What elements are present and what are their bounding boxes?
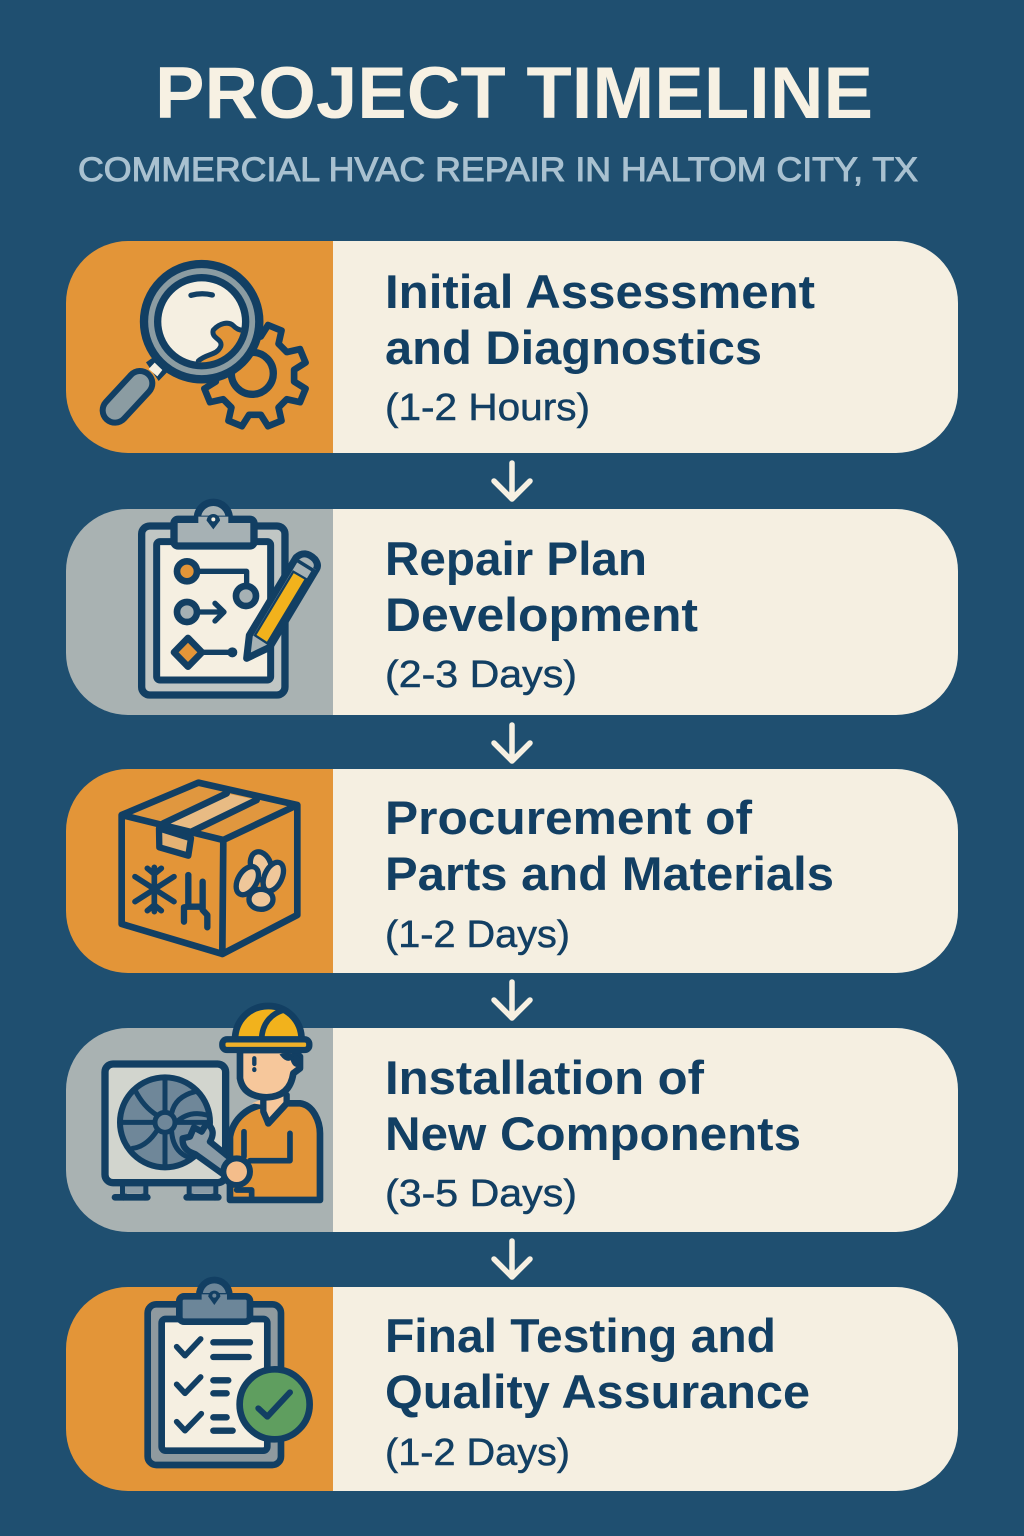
step 2 duration: (2-3 Days) <box>385 654 577 696</box>
step 3 heading: Procurement of <box>385 791 752 844</box>
icon: checklist with green check <box>148 1280 310 1465</box>
panel: step 3 procurement <box>66 769 958 973</box>
panel: step 4 installation: New Components <box>385 1107 801 1160</box>
panel: step 1 initial assessment: and Diagnostics <box>385 321 762 374</box>
panel: step 5 final testing <box>66 1280 958 1491</box>
icon: clipboard with plan and pencil <box>142 502 317 695</box>
arrow 1 <box>494 463 530 499</box>
step 2 heading: Repair Plan <box>385 532 647 585</box>
step 3 duration: (1-2 Days) <box>385 914 570 956</box>
step 5 duration: (1-2 Days) <box>385 1432 570 1474</box>
title: PROJECT TIMELINE <box>155 53 873 134</box>
step 5 heading: Final Testing and <box>385 1309 776 1362</box>
panel: step 3 procurement: Parts and Materials <box>385 847 834 900</box>
panel: step 2 repair plan: Development <box>385 588 698 641</box>
step 4 duration: (3-5 Days) <box>385 1173 577 1215</box>
panel: step 1 initial assessment <box>66 241 958 453</box>
arrow 4 <box>494 1241 530 1277</box>
step 1 heading: Initial Assessment <box>385 265 815 318</box>
arrow 2 <box>494 725 530 761</box>
icon: magnifying glass and gear <box>115 264 306 426</box>
panel: step 5 final testing: Quality Assurance <box>385 1365 810 1418</box>
arrow 3 <box>494 982 530 1018</box>
step 1 duration: (1-2 Hours) <box>385 387 590 429</box>
icon: technician servicing AC unit <box>105 1006 320 1200</box>
panel: step 4 installation <box>66 1006 958 1232</box>
panel: step 2 repair plan <box>66 502 958 715</box>
subtitle: COMMERCIAL HVAC REPAIR IN HALTOM CITY, TX <box>78 151 918 189</box>
icon: parts box <box>122 783 297 954</box>
step 4 heading: Installation of <box>385 1051 704 1104</box>
